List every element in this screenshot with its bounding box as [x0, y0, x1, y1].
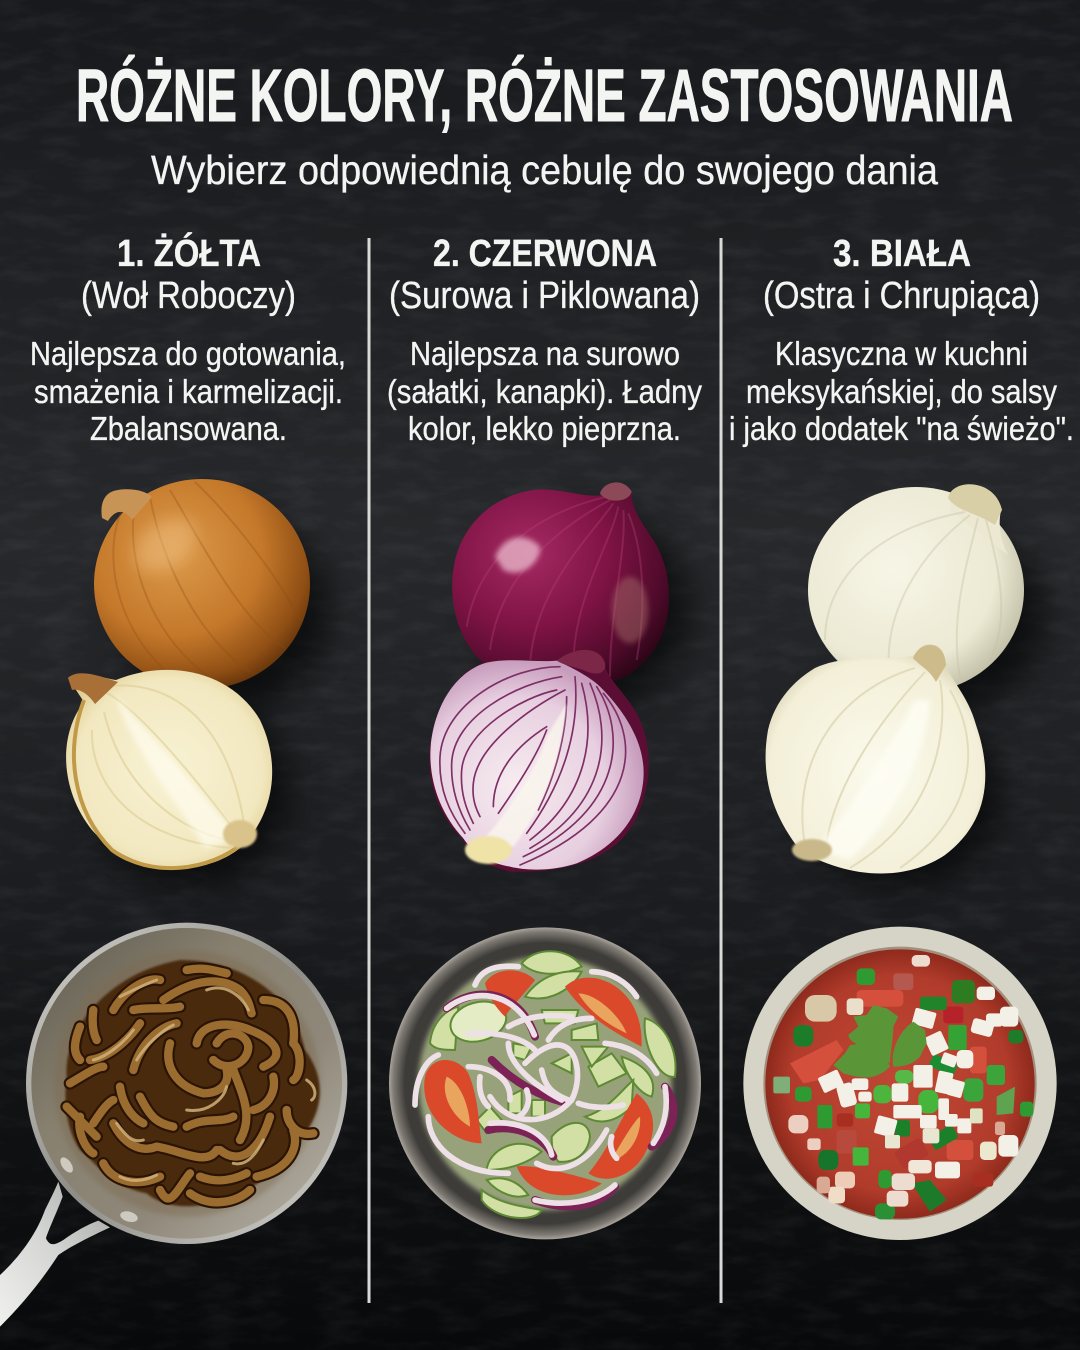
column 2 text	[387, 233, 702, 447]
salsa contents	[773, 955, 1033, 1219]
tomato pieces	[790, 973, 993, 1187]
divider right	[720, 238, 722, 1303]
pan handle	[0, 1182, 110, 1327]
description: czerwona: kolor, lekko pieprzna.	[408, 410, 681, 447]
red whole onion	[452, 482, 690, 710]
subheading: surowa i piklowana: (Surowa i Piklowana)	[389, 275, 700, 317]
column 3 text	[729, 233, 1074, 447]
description: biała	[729, 335, 1074, 447]
subheading: wół roboczy: (Woł Roboczy)	[81, 275, 296, 317]
cucumber pieces	[430, 951, 676, 1218]
description: żółta	[30, 335, 346, 447]
red onion rings	[415, 966, 673, 1206]
yellow cut onion	[66, 670, 290, 885]
glass bowl with salad	[389, 927, 701, 1239]
white whole onion	[808, 484, 1045, 710]
salad contents	[415, 951, 676, 1218]
subheading: ostra i chrupiąca: (Ostra i Chrupiąca)	[763, 275, 1040, 317]
heading: żółta: 1. ŻÓŁTA	[117, 231, 261, 275]
green pepper pieces	[773, 968, 1033, 1219]
subtitle: Wybierz odpowiednią cebulę do swojego dania	[151, 147, 938, 193]
cilantro leaf	[833, 1005, 927, 1077]
white bowl with salsa	[743, 927, 1057, 1240]
yellow whole onion	[94, 479, 330, 710]
red cut onion	[429, 650, 649, 872]
heading: czerwona: 2. CZERWONA	[433, 233, 657, 275]
caramelized onion strands	[65, 960, 320, 1206]
description: czerwona	[387, 335, 702, 447]
onion pieces	[788, 955, 1018, 1207]
description: czerwona: (sałatki, kanapki). Ładny	[387, 373, 702, 410]
frying pan with caramelized onions	[0, 923, 347, 1327]
description: biała: Klasyczna w kuchni	[775, 335, 1028, 372]
description: czerwona: Najlepsza na surowo	[410, 335, 680, 372]
divider left	[368, 238, 370, 1303]
description: żółta: smażenia i karmelizacji.	[34, 373, 343, 410]
description: żółta: Najlepsza do gotowania,	[30, 335, 346, 372]
column 1 text	[30, 231, 346, 447]
heading: biała: 3. BIAŁA	[833, 233, 971, 275]
description: żółta: Zbalansowana.	[90, 410, 287, 447]
tomato wedges	[424, 970, 653, 1195]
white cut onion	[766, 645, 1000, 885]
